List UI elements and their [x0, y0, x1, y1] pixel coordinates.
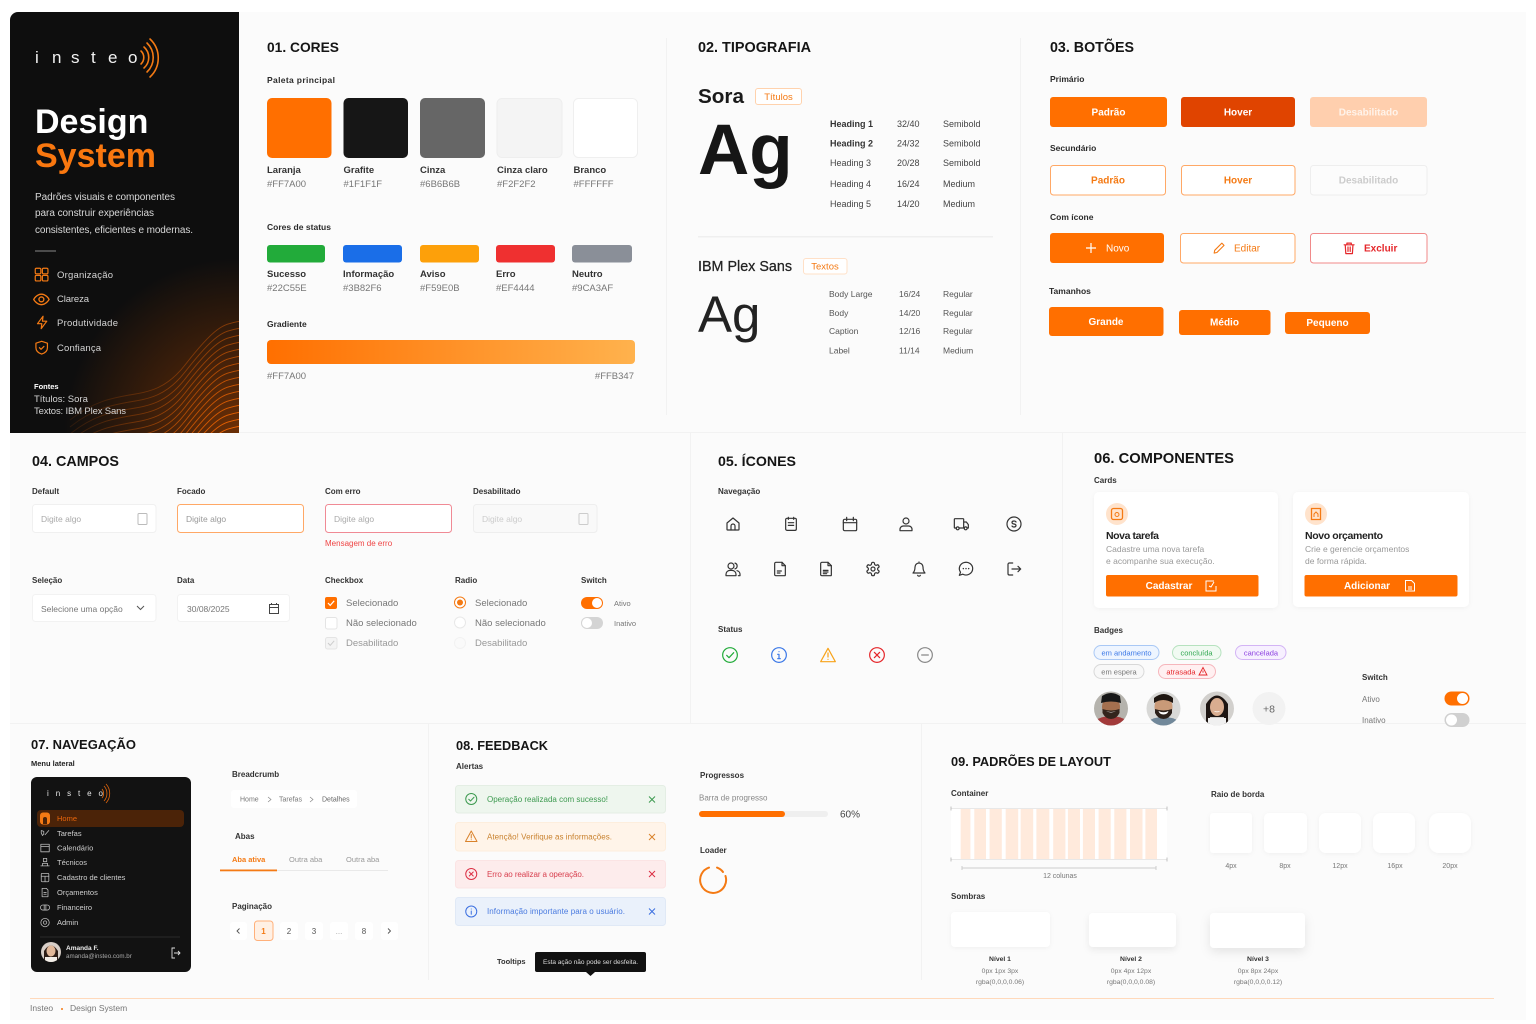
label: badges: Badges — [1094, 626, 1123, 635]
buttons: secondary: Desabilitado — [1339, 176, 1398, 186]
icon: eye — [34, 294, 49, 305]
font name: Sora — [698, 86, 802, 108]
menu items: Tarefas — [57, 829, 82, 838]
panel: 02 tipografia — [698, 40, 993, 356]
field: error — [325, 487, 452, 548]
table: Sora type scale: Medium — [943, 199, 975, 209]
text: fonts note: Fontes — [34, 382, 59, 391]
menu items: Admin — [57, 918, 78, 927]
card: novo orcamento: Crie e gerencie orçamentos — [1305, 544, 1409, 554]
label: menu lateral: Menu lateral — [31, 759, 75, 768]
label: cards: Cards — [1094, 476, 1117, 485]
gradient bar — [267, 340, 635, 382]
badges: atrasada — [1166, 668, 1196, 676]
tabs: Abas — [235, 832, 255, 841]
alert: success: Operação realizada com sucesso! — [487, 795, 608, 804]
table: Sora type scale: Medium — [943, 179, 975, 189]
tabs: Outra aba — [346, 855, 380, 864]
heading: 06 componentes: 06. COMPONENTES — [1094, 451, 1234, 467]
specimen: Sora Ag: Ag — [698, 111, 793, 190]
text: brand description: consistentes, eficientes e modernas. — [35, 225, 193, 236]
panel: 06 componentes — [1094, 451, 1470, 727]
user profile: Amanda F. — [66, 945, 99, 952]
swatch group: main palette: Branco — [574, 165, 606, 176]
heading: 07 navegacao: 07. NAVEGAÇÃO — [31, 737, 136, 752]
component switches — [1362, 673, 1470, 727]
buttons: secondary: Hover — [1224, 176, 1252, 186]
label: com icone: Com ícone — [1050, 212, 1094, 222]
control group: checkbox: Desabilitado — [346, 638, 398, 649]
tooltip: Esta ação não pode ser desfeita. — [543, 959, 638, 966]
field: error: Com erro — [325, 487, 361, 496]
side menu mockup — [31, 777, 191, 972]
field: select: Selecione uma opção — [41, 604, 123, 614]
field: disabled: Desabilitado — [473, 487, 521, 496]
text: fonts note: Títulos: Sora — [34, 394, 89, 405]
shadow samples — [951, 892, 1305, 986]
table: IBM Plex type scale: Label — [829, 346, 850, 356]
progress bar: Progressos — [700, 771, 745, 780]
card: nova tarefa: e acompanhe sua execução. — [1106, 556, 1215, 566]
font name: IBM Plex Sans — [698, 258, 847, 275]
container grid — [951, 806, 1167, 880]
swatch group: main palette: #FFFFFF — [574, 179, 614, 190]
side menu mockup: Home — [57, 814, 77, 823]
buttons: secondary: Padrão — [1091, 176, 1125, 186]
alert: error: Erro ao realizar a operação. — [487, 870, 584, 879]
swatch group: main palette: #FF7A00 — [267, 179, 306, 190]
table: Sora type scale: 16/24 — [897, 179, 920, 189]
progress bar: 60% — [840, 810, 860, 820]
border radius samples — [1210, 790, 1471, 870]
panel: brand sidebar — [10, 12, 239, 433]
text: fonts note — [34, 382, 126, 417]
component switches: Inativo — [1362, 716, 1386, 725]
shadow samples: rgba(0,0,0,0.06) — [976, 979, 1024, 986]
label: primario: Primário — [1050, 74, 1084, 84]
menu items: Cadastro de clientes — [57, 873, 126, 882]
table: IBM Plex type scale: Body — [829, 308, 849, 318]
gradient bar: #FFB347 — [595, 371, 634, 382]
logo: insteo: o — [128, 48, 137, 67]
text: brand description: Padrões visuais e componentes — [35, 192, 175, 203]
control group: checkbox: Selecionado — [346, 598, 398, 609]
buttons: primary: Desabilitado — [1339, 108, 1398, 118]
breadcrumb: Home — [240, 796, 259, 804]
buttons: sizes: Grande — [1088, 317, 1124, 328]
label: tamanhos: Tamanhos — [1049, 286, 1091, 296]
swatch group: status colors: #EF4444 — [496, 283, 535, 294]
buttons: sizes: Pequeno — [1306, 318, 1349, 329]
table: IBM Plex type scale: 12/16 — [899, 326, 921, 336]
font name: Sora: Títulos — [764, 92, 793, 103]
list: brand principles: Organização — [57, 270, 113, 281]
panel: 03 botoes — [1049, 38, 1427, 336]
buttons: primary: Hover — [1224, 108, 1252, 118]
table: Sora type scale: Heading 4 — [830, 179, 871, 189]
heading: 04 campos: 04. CAMPOS — [32, 453, 119, 470]
panel: 09 padroes de layout — [951, 754, 1471, 986]
menu items: Técnicos — [57, 858, 87, 867]
table: IBM Plex type scale: Body Large — [829, 289, 873, 299]
swatch group: status colors: #3B82F6 — [343, 283, 382, 294]
border radius samples: 20px — [1442, 863, 1458, 870]
border radius samples: 12px — [1332, 863, 1348, 870]
swatch group: status colors: #22C55E — [267, 283, 307, 294]
control group: checkbox — [325, 576, 417, 649]
swatch group: main palette — [267, 98, 638, 190]
swatch group: status colors: Aviso — [420, 269, 446, 280]
card: novo orcamento: de forma rápida. — [1305, 556, 1367, 566]
field: default — [32, 487, 156, 532]
buttons: sizes: Médio — [1210, 318, 1239, 328]
icon set: navigation — [726, 517, 1021, 576]
logo: insteo: t — [91, 48, 96, 67]
footer — [30, 998, 1494, 1013]
menu items: Financeiro — [57, 903, 92, 912]
label: navegacao: Navegação — [718, 487, 760, 496]
swatch group: status colors: Informação — [343, 269, 394, 280]
alert: warning — [456, 822, 666, 851]
loader — [700, 846, 727, 893]
swatch group: main palette: Grafite — [344, 165, 374, 176]
avatar: bearded man — [1146, 691, 1181, 727]
panel: 05 icones — [718, 453, 1021, 662]
logo: insteo — [35, 39, 158, 77]
field: disabled — [473, 487, 597, 532]
control group: switch: Ativo — [614, 599, 631, 608]
card: novo orcamento: Adicionar — [1344, 581, 1390, 592]
table: IBM Plex type scale: Regular — [943, 308, 973, 318]
shadow samples: Sombras — [951, 892, 986, 901]
list: brand principles: Clareza — [57, 294, 90, 305]
panel: 04 campos — [32, 453, 636, 649]
field: date — [177, 576, 290, 622]
progress bar — [699, 771, 860, 820]
table: Sora type scale: 24/32 — [897, 138, 920, 148]
icon set: status — [723, 648, 932, 662]
tabs: Aba ativa — [232, 855, 266, 864]
control group: radio — [454, 576, 546, 649]
heading: Design System: System — [35, 137, 156, 175]
table: Sora type scale — [830, 119, 981, 209]
field: focused: Focado — [177, 487, 206, 496]
border radius samples: 8px — [1279, 863, 1291, 870]
text: brand description — [35, 192, 193, 236]
swatch group: status colors: Sucesso — [267, 269, 306, 280]
breadcrumb: Tarefas — [279, 796, 302, 804]
table: Sora type scale: Heading 5 — [830, 199, 871, 209]
card: novo orcamento — [1293, 492, 1469, 607]
user profile: amanda@insteo.com.br — [66, 953, 132, 960]
shadow samples: 0px 1px 3px — [982, 968, 1019, 975]
tabs: Outra aba — [289, 855, 323, 864]
menu items: Orçamentos — [57, 888, 98, 897]
alert: info: Informação importante para o usuário. — [487, 907, 625, 916]
field: error: Digite algo — [334, 514, 374, 524]
user profile — [41, 942, 180, 963]
tooltip — [497, 952, 646, 976]
swatch group: main palette: Laranja — [267, 165, 302, 176]
container grid: 12 colunas — [1043, 873, 1077, 880]
breadcrumb — [231, 770, 357, 808]
badges — [1094, 646, 1286, 678]
list: brand principles — [34, 268, 118, 354]
buttons: secondary — [1050, 166, 1427, 195]
icon: bolt — [37, 316, 47, 329]
loader: Loader — [700, 846, 727, 855]
table: Sora type scale: 32/40 — [897, 119, 920, 129]
buttons: with icon: Editar — [1234, 244, 1261, 254]
table: Sora type scale: Heading 3 — [830, 158, 871, 168]
swatch group: main palette: #F2F2F2 — [497, 179, 536, 190]
shadow samples: Nível 3 — [1247, 956, 1269, 963]
text: fonts note: Textos: IBM Plex Sans — [34, 406, 126, 417]
table: IBM Plex type scale: 16/24 — [899, 289, 921, 299]
field: default: Default — [32, 487, 59, 496]
label: status: Status — [718, 625, 743, 634]
border radius samples: 4px — [1225, 863, 1237, 870]
tabs — [220, 832, 388, 871]
progress bar: Barra de progresso — [699, 794, 768, 802]
field: focused: Digite algo — [186, 514, 226, 524]
card: nova tarefa: Nova tarefa — [1106, 530, 1159, 542]
heading: Design System: Design — [35, 103, 148, 141]
table: IBM Plex type scale: Medium — [943, 346, 973, 356]
shadow samples: 0px 4px 12px — [1111, 968, 1152, 975]
table: IBM Plex type scale: 14/20 — [899, 308, 921, 318]
buttons: with icon: Excluir — [1364, 244, 1397, 254]
shadow samples: rgba(0,0,0,0.08) — [1107, 979, 1155, 986]
swatch group: status colors: Neutro — [572, 269, 603, 280]
table: IBM Plex type scale: 11/14 — [899, 346, 920, 356]
table: Sora type scale: 14/20 — [897, 199, 920, 209]
pagination: 1 — [261, 927, 266, 936]
font name: IBM Plex Sans: IBM Plex Sans — [698, 259, 792, 275]
swatch group: main palette: Cinza — [420, 165, 446, 176]
alert: error — [456, 860, 666, 888]
card: novo orcamento: Novo orçamento — [1305, 530, 1383, 542]
badges: em andamento — [1101, 648, 1152, 658]
specimen: IBM Plex Ag: Ag — [698, 286, 760, 343]
card: nova tarefa: Cadastre uma nova tarefa — [1106, 544, 1205, 554]
avatar group — [1094, 691, 1286, 727]
pagination: 8 — [362, 927, 367, 936]
shadow samples: Nível 1 — [989, 956, 1011, 963]
pagination: Paginação — [232, 902, 272, 911]
control group: switch: Switch — [581, 576, 607, 585]
label: paleta principal: Paleta principal — [267, 75, 335, 85]
table: IBM Plex type scale: Regular — [943, 326, 973, 336]
panel: 01 cores — [267, 39, 638, 382]
heading: 09 padroes de layout: 09. PADRÕES DE LAYOUT — [951, 754, 1111, 769]
heading: 03 botoes: 03. BOTÕES — [1050, 38, 1134, 56]
panel: 08 feedback — [456, 738, 860, 976]
tooltip: Tooltips — [497, 957, 526, 966]
pagination: ... — [336, 927, 342, 936]
card: nova tarefa: Cadastrar — [1146, 581, 1192, 592]
swatch group: status colors: Erro — [496, 269, 516, 280]
avatar: man with cap — [1094, 691, 1128, 727]
list: brand principles: Confiança — [57, 343, 102, 354]
shadow samples: 0px 8px 24px — [1238, 968, 1279, 975]
heading: 02 tipografia: 02. TIPOGRAFIA — [698, 40, 812, 56]
avatar: woman — [1200, 691, 1234, 727]
table: Sora type scale: 20/28 — [897, 158, 920, 168]
field: date: 30/08/2025 — [187, 604, 230, 614]
logo: insteo: i — [35, 48, 39, 67]
heading: 05 icones: 05. ÍCONES — [718, 453, 796, 470]
table: IBM Plex type scale: Regular — [943, 289, 973, 299]
buttons: primary: Padrão — [1092, 108, 1125, 118]
alert: success — [456, 786, 666, 813]
avatar group: +8 — [1263, 704, 1275, 716]
text: brand description: para construir experiências — [35, 208, 154, 219]
swatch group: main palette: #1F1F1F — [344, 179, 382, 190]
heading: 01 cores: 01. CORES — [267, 39, 339, 55]
control group: checkbox: Não selecionado — [346, 618, 417, 629]
badges: concluída — [1180, 648, 1213, 658]
breadcrumb: Detalhes — [322, 796, 350, 804]
alert: warning: Atenção! Verifique as informações. — [487, 832, 612, 842]
control group: radio: Não selecionado — [475, 618, 546, 629]
field: disabled: Digite algo — [482, 514, 522, 524]
pagination: 2 — [287, 927, 292, 936]
icon: shield — [36, 341, 47, 354]
icon: organization — [35, 268, 48, 281]
table: Sora type scale: Semibold — [943, 119, 981, 129]
border radius samples: 16px — [1387, 863, 1403, 870]
swatch group: main palette: Cinza claro — [497, 165, 548, 176]
swatch group: status colors: #9CA3AF — [572, 283, 613, 294]
field: select — [32, 576, 156, 622]
footer: Insteo — [30, 1003, 53, 1013]
logo: insteo: n — [52, 48, 61, 67]
buttons: primary — [1050, 97, 1427, 127]
field: error: Mensagem de erro — [325, 539, 393, 548]
panel: 07 navegacao — [31, 737, 398, 972]
pagination: 3 — [312, 927, 317, 936]
gradient bar: #FF7A00 — [267, 371, 306, 382]
control group: checkbox: Checkbox — [325, 576, 364, 585]
buttons: with icon: Novo — [1106, 244, 1130, 254]
label: container: Container — [951, 789, 988, 798]
logo: small insteo — [47, 784, 110, 803]
component switches: Ativo — [1362, 695, 1380, 704]
table: IBM Plex type scale — [829, 289, 973, 356]
font name: Sora: Sora — [698, 86, 745, 108]
list: brand principles: Produtividade — [57, 318, 118, 329]
swatch group: status colors: #F59E0B — [420, 283, 460, 294]
label: alertas: Alertas — [456, 762, 484, 771]
shadow samples: Nível 2 — [1120, 956, 1142, 963]
table: Sora type scale: Heading 1 — [830, 119, 873, 129]
table: IBM Plex type scale: Caption — [829, 326, 859, 336]
menu items — [40, 829, 126, 927]
menu items: Calendário — [57, 844, 93, 852]
border radius samples: Raio de borda — [1211, 790, 1265, 799]
swatch group: status colors — [267, 245, 632, 294]
control group: radio: Selecionado — [475, 598, 527, 609]
control group: switch: Inativo — [614, 619, 636, 628]
label: secundario: Secundário — [1050, 143, 1096, 153]
label: gradiente: Gradiente — [267, 319, 307, 329]
badges: em espera — [1101, 668, 1138, 676]
logo: small insteo: i n s t e o — [47, 789, 104, 798]
badges: cancelada — [1244, 648, 1279, 658]
logo: insteo: s — [71, 48, 80, 67]
buttons: with icon — [1050, 233, 1427, 263]
field: select: Seleção — [32, 576, 62, 585]
card: nova tarefa — [1094, 492, 1278, 608]
pagination — [230, 902, 398, 940]
table: Sora type scale: Heading 2 — [830, 138, 873, 148]
footer: Design System — [70, 1003, 127, 1013]
control group: switch — [581, 576, 636, 629]
label: cores de status: Cores de status — [267, 222, 331, 232]
logo: insteo: e — [108, 48, 117, 67]
field: date: Data — [177, 576, 195, 585]
heading: 08 feedback: 08. FEEDBACK — [456, 738, 549, 753]
table: Sora type scale: Semibold — [943, 138, 981, 148]
heading: Design System — [35, 103, 156, 175]
swatch group: main palette: #6B6B6B — [420, 179, 460, 190]
alert: info — [456, 898, 666, 926]
shadow samples: rgba(0,0,0,0.12) — [1234, 979, 1282, 986]
field: focused — [177, 487, 304, 532]
breadcrumb: Breadcrumb — [232, 770, 279, 779]
component switches: Switch — [1362, 673, 1388, 682]
field: default: Digite algo — [41, 514, 81, 524]
table: Sora type scale: Semibold — [943, 158, 981, 168]
buttons: sizes — [1049, 307, 1370, 336]
font name: IBM Plex Sans: Textos — [811, 262, 839, 272]
control group: radio: Desabilitado — [475, 638, 527, 649]
control group: radio: Radio — [455, 576, 477, 585]
